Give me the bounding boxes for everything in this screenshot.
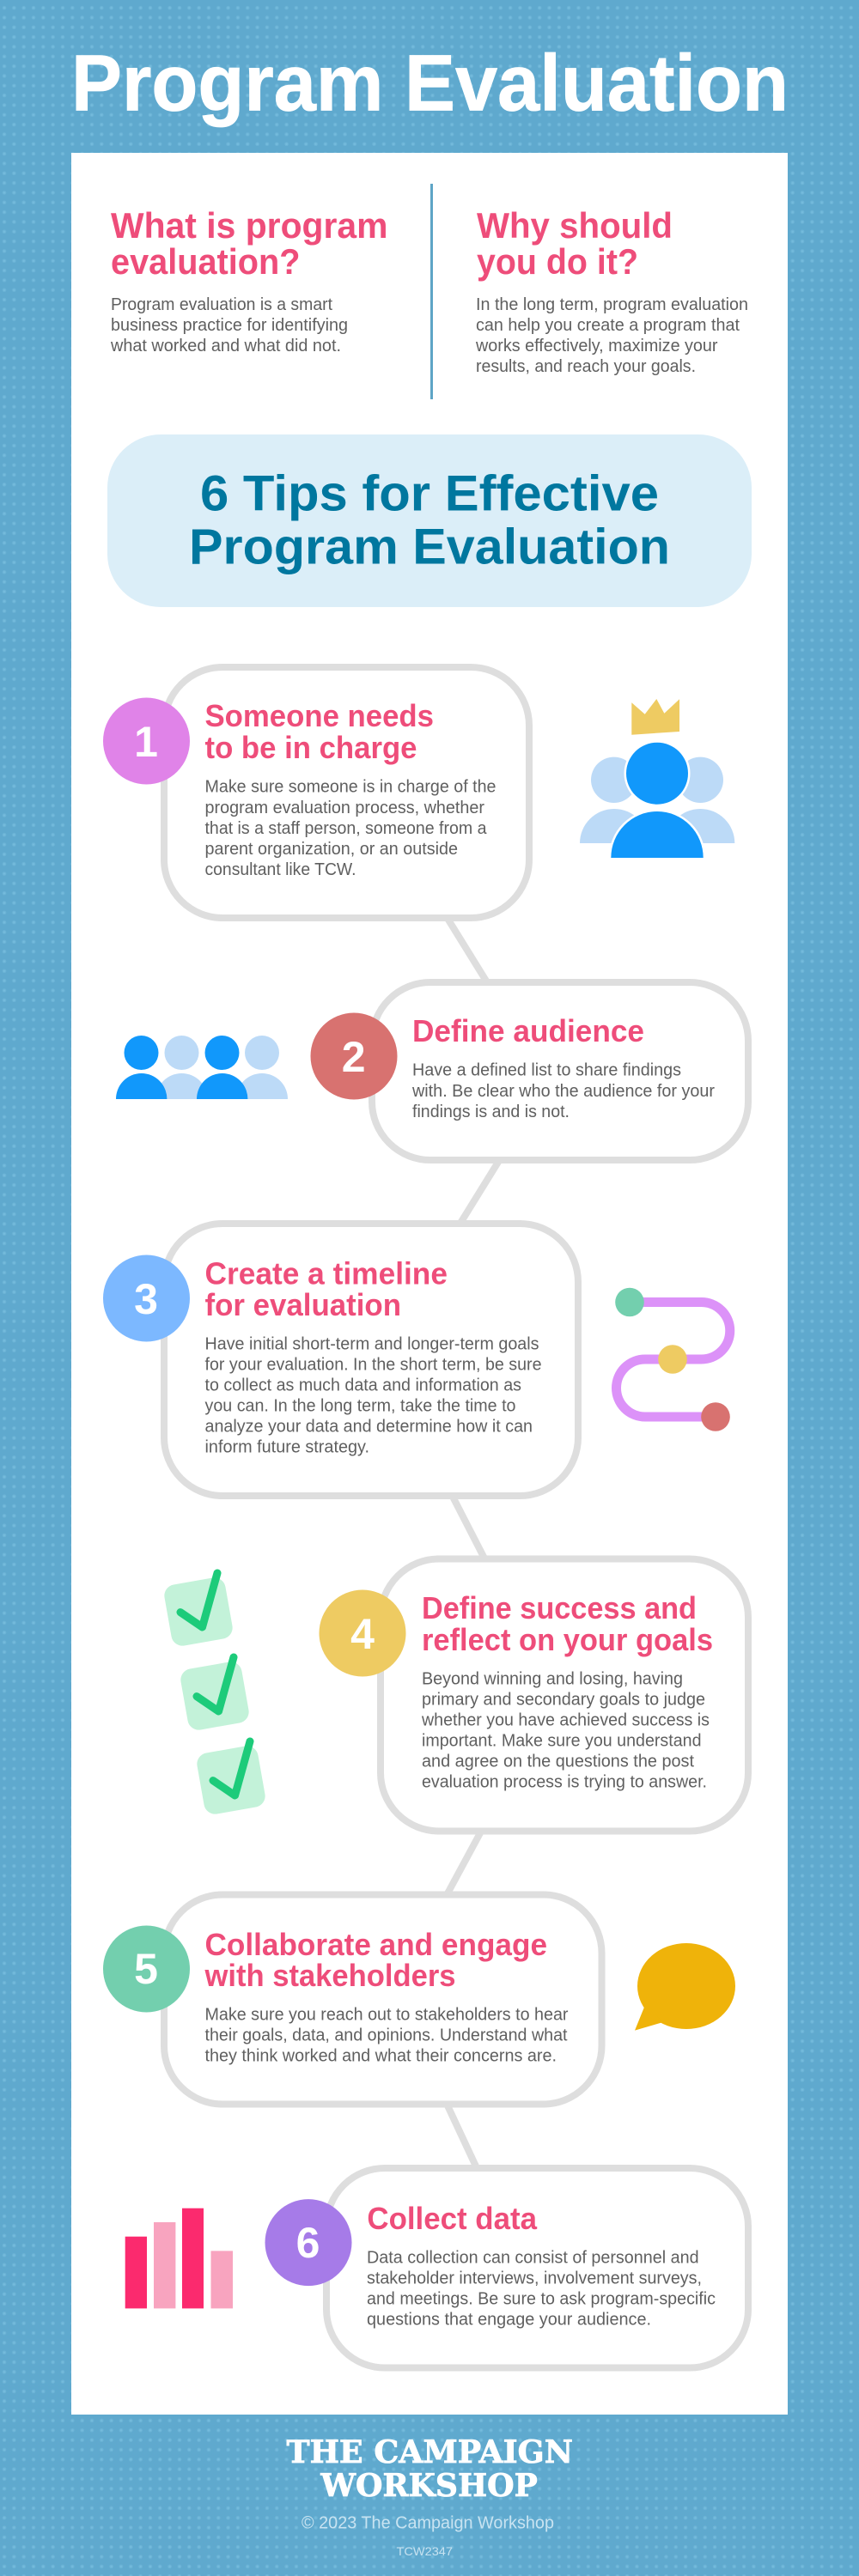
heading: tip 5: with stakeholders [204, 1958, 455, 1993]
panel: tip 3 [103, 1224, 578, 1496]
text block: copyright: © 2023 The Campaign Workshop [302, 2514, 554, 2533]
text block: reasons: results, and reach your goals. [476, 357, 696, 376]
heading: what is program evaluation [111, 205, 388, 282]
heading: tip 5: Collaborate and engage [204, 1927, 547, 1962]
panel: why should you do it [475, 205, 748, 376]
text block: definition: what worked and what did not. [110, 337, 341, 355]
heading: tip 4 [422, 1590, 713, 1657]
text block: reasons: works effectively, maximize your [475, 337, 718, 355]
badge: number 3: 3 [134, 1275, 158, 1323]
text block: tip 6: stakeholder interviews, involvement surveys, [367, 2269, 702, 2288]
text block: definition [110, 295, 348, 355]
text block: tip 5: they think worked and what their concerns are. [204, 2047, 557, 2066]
text block: tip 4: primary and secondary goals to judge [422, 1691, 705, 1710]
text block: tip 3: you can. In the long term, take the time to [204, 1396, 515, 1415]
badge: number 1: 1 [134, 718, 158, 766]
text block: tip 1: program evaluation process, whether [204, 799, 484, 817]
badge: number 4 [320, 1590, 405, 1676]
heading: what is program evaluation: evaluation? [111, 241, 301, 282]
panel: tip 1 [103, 667, 529, 918]
heading: what is program evaluation: What is program [111, 205, 388, 246]
text block: tip 2: findings is and is not. [412, 1103, 570, 1121]
heading: 6 tips: Program Evaluation [189, 519, 670, 575]
text block: tip 3: for your evaluation. In the short term, be sure [204, 1355, 541, 1374]
logo: the campaign workshop [287, 2434, 573, 2504]
badge: number 2 [311, 1013, 397, 1099]
icon: audience group [116, 1036, 288, 1099]
icon: speech bubble [635, 1943, 735, 2031]
text block: tip 6 [367, 2248, 716, 2330]
arrow: connector 4 to 5 [447, 1830, 482, 1895]
badge: number 2: 2 [342, 1033, 366, 1081]
icon: crowned leader with team [580, 699, 734, 858]
heading: tip 3 [204, 1255, 448, 1322]
text block: tip 5: their goals, data, and opinions. Understand what [204, 2026, 568, 2045]
chart: bar chart icon [125, 2208, 233, 2308]
title: Program Evaluation [71, 39, 789, 128]
text block: definition: Program evaluation is a smart [111, 295, 332, 314]
text block: tip 6: Data collection can consist of personnel and [367, 2248, 699, 2267]
text block: tip 6: and meetings. Be sure to ask program-specific [367, 2290, 716, 2309]
heading: why should you do it: you do it? [477, 241, 638, 282]
text block: tip 5 [204, 2006, 569, 2066]
heading: tip 1: to be in charge [204, 730, 417, 765]
text block: tip 4: Beyond winning and losing, having [422, 1670, 683, 1689]
text block: tip 3: analyze your data and determine how it can [204, 1418, 533, 1437]
badge: number 5: 5 [134, 1945, 158, 1993]
text block: tip 2: with. Be clear who the audience for your [411, 1082, 715, 1101]
text block: tip 5: Make sure you reach out to stakeholders to hear [204, 2006, 569, 2025]
text block: reasons [475, 295, 748, 376]
icon: timeline path [615, 1288, 730, 1431]
icon: check boxes [162, 1573, 267, 1816]
badge: number 5 [103, 1925, 190, 2013]
arrow: connector 1 to 2 [447, 917, 487, 982]
heading: tip 4: reflect on your goals [422, 1622, 713, 1657]
text block: tip 4 [421, 1670, 710, 1792]
text block: tip 3: Have initial short-term and longer-term goals [204, 1335, 539, 1354]
heading: why should you do it: Why should [477, 205, 673, 246]
panel: white content area [71, 153, 788, 2415]
heading: tip 5 [204, 1927, 547, 1993]
badge: number 6: 6 [296, 2219, 320, 2267]
heading: tip 3: Create a timeline [204, 1255, 448, 1291]
heading: tip 3: for evaluation [204, 1287, 401, 1322]
text block: tip 1: that is a staff person, someone from a [204, 819, 487, 838]
heading: tip 2: Define audience [412, 1013, 644, 1048]
text block: tip 4: whether you have achieved success is [421, 1710, 710, 1729]
text block: tip 3: to collect as much data and information as [204, 1376, 521, 1394]
text block: tip 4: and agree on the questions the post [422, 1753, 694, 1771]
panel: what is program evaluation [110, 205, 387, 355]
heading: tip 4: Define success and [422, 1590, 697, 1625]
panel: tips heading pill [107, 434, 752, 607]
arrow: connector 2 to 3 [460, 1159, 500, 1224]
text block: tip 1 [204, 778, 497, 879]
panel: tip 5 [103, 1894, 601, 2104]
arrow: connector 3 to 4 [452, 1495, 484, 1558]
badge: number 1 [103, 697, 190, 785]
text block: reasons: In the long term, program evaluation [476, 295, 748, 314]
text block: tip 6: questions that engage your audience. [367, 2311, 651, 2330]
text block: tip 2 [411, 1061, 715, 1121]
logo: the campaign workshop: WORKSHOP [320, 2468, 538, 2504]
badge: number 6 [265, 2199, 352, 2286]
text block: tip 2: Have a defined list to share findings [412, 1061, 681, 1080]
arrow: connector 5 to 6 [447, 2104, 477, 2168]
text block: tip 3: inform future strategy. [204, 1437, 369, 1456]
panel: tip 6 [265, 2168, 748, 2368]
heading: 6 tips: 6 Tips for Effective [200, 466, 659, 522]
panel: tip 4 [320, 1559, 748, 1831]
text block: tip 4: important. Make sure you understand [422, 1731, 701, 1750]
text block: tip 1: parent organization, or an outside [204, 840, 458, 859]
heading: tip 6: Collect data [367, 2201, 538, 2236]
text block: reasons: can help you create a program that [476, 316, 740, 335]
text block: tip 3 [204, 1335, 541, 1456]
heading: 6 tips [189, 466, 670, 575]
text block: tip 4: evaluation process is trying to answer. [422, 1773, 707, 1792]
heading: tip 1: Someone needs [204, 698, 434, 733]
text block: code: TCW2347 [397, 2544, 453, 2558]
text block: tip 1: consultant like TCW. [204, 860, 356, 879]
heading: tip 1 [204, 698, 434, 765]
badge: number 3 [103, 1255, 190, 1341]
badge: number 4: 4 [350, 1610, 375, 1658]
text block: definition: business practice for identifying [111, 316, 348, 335]
text block: tip 1: Make sure someone is in charge of the [204, 778, 497, 797]
logo: the campaign workshop: THE CAMPAIGN [287, 2434, 573, 2470]
heading: why should you do it [477, 205, 673, 282]
panel: tip 2 [311, 982, 748, 1160]
